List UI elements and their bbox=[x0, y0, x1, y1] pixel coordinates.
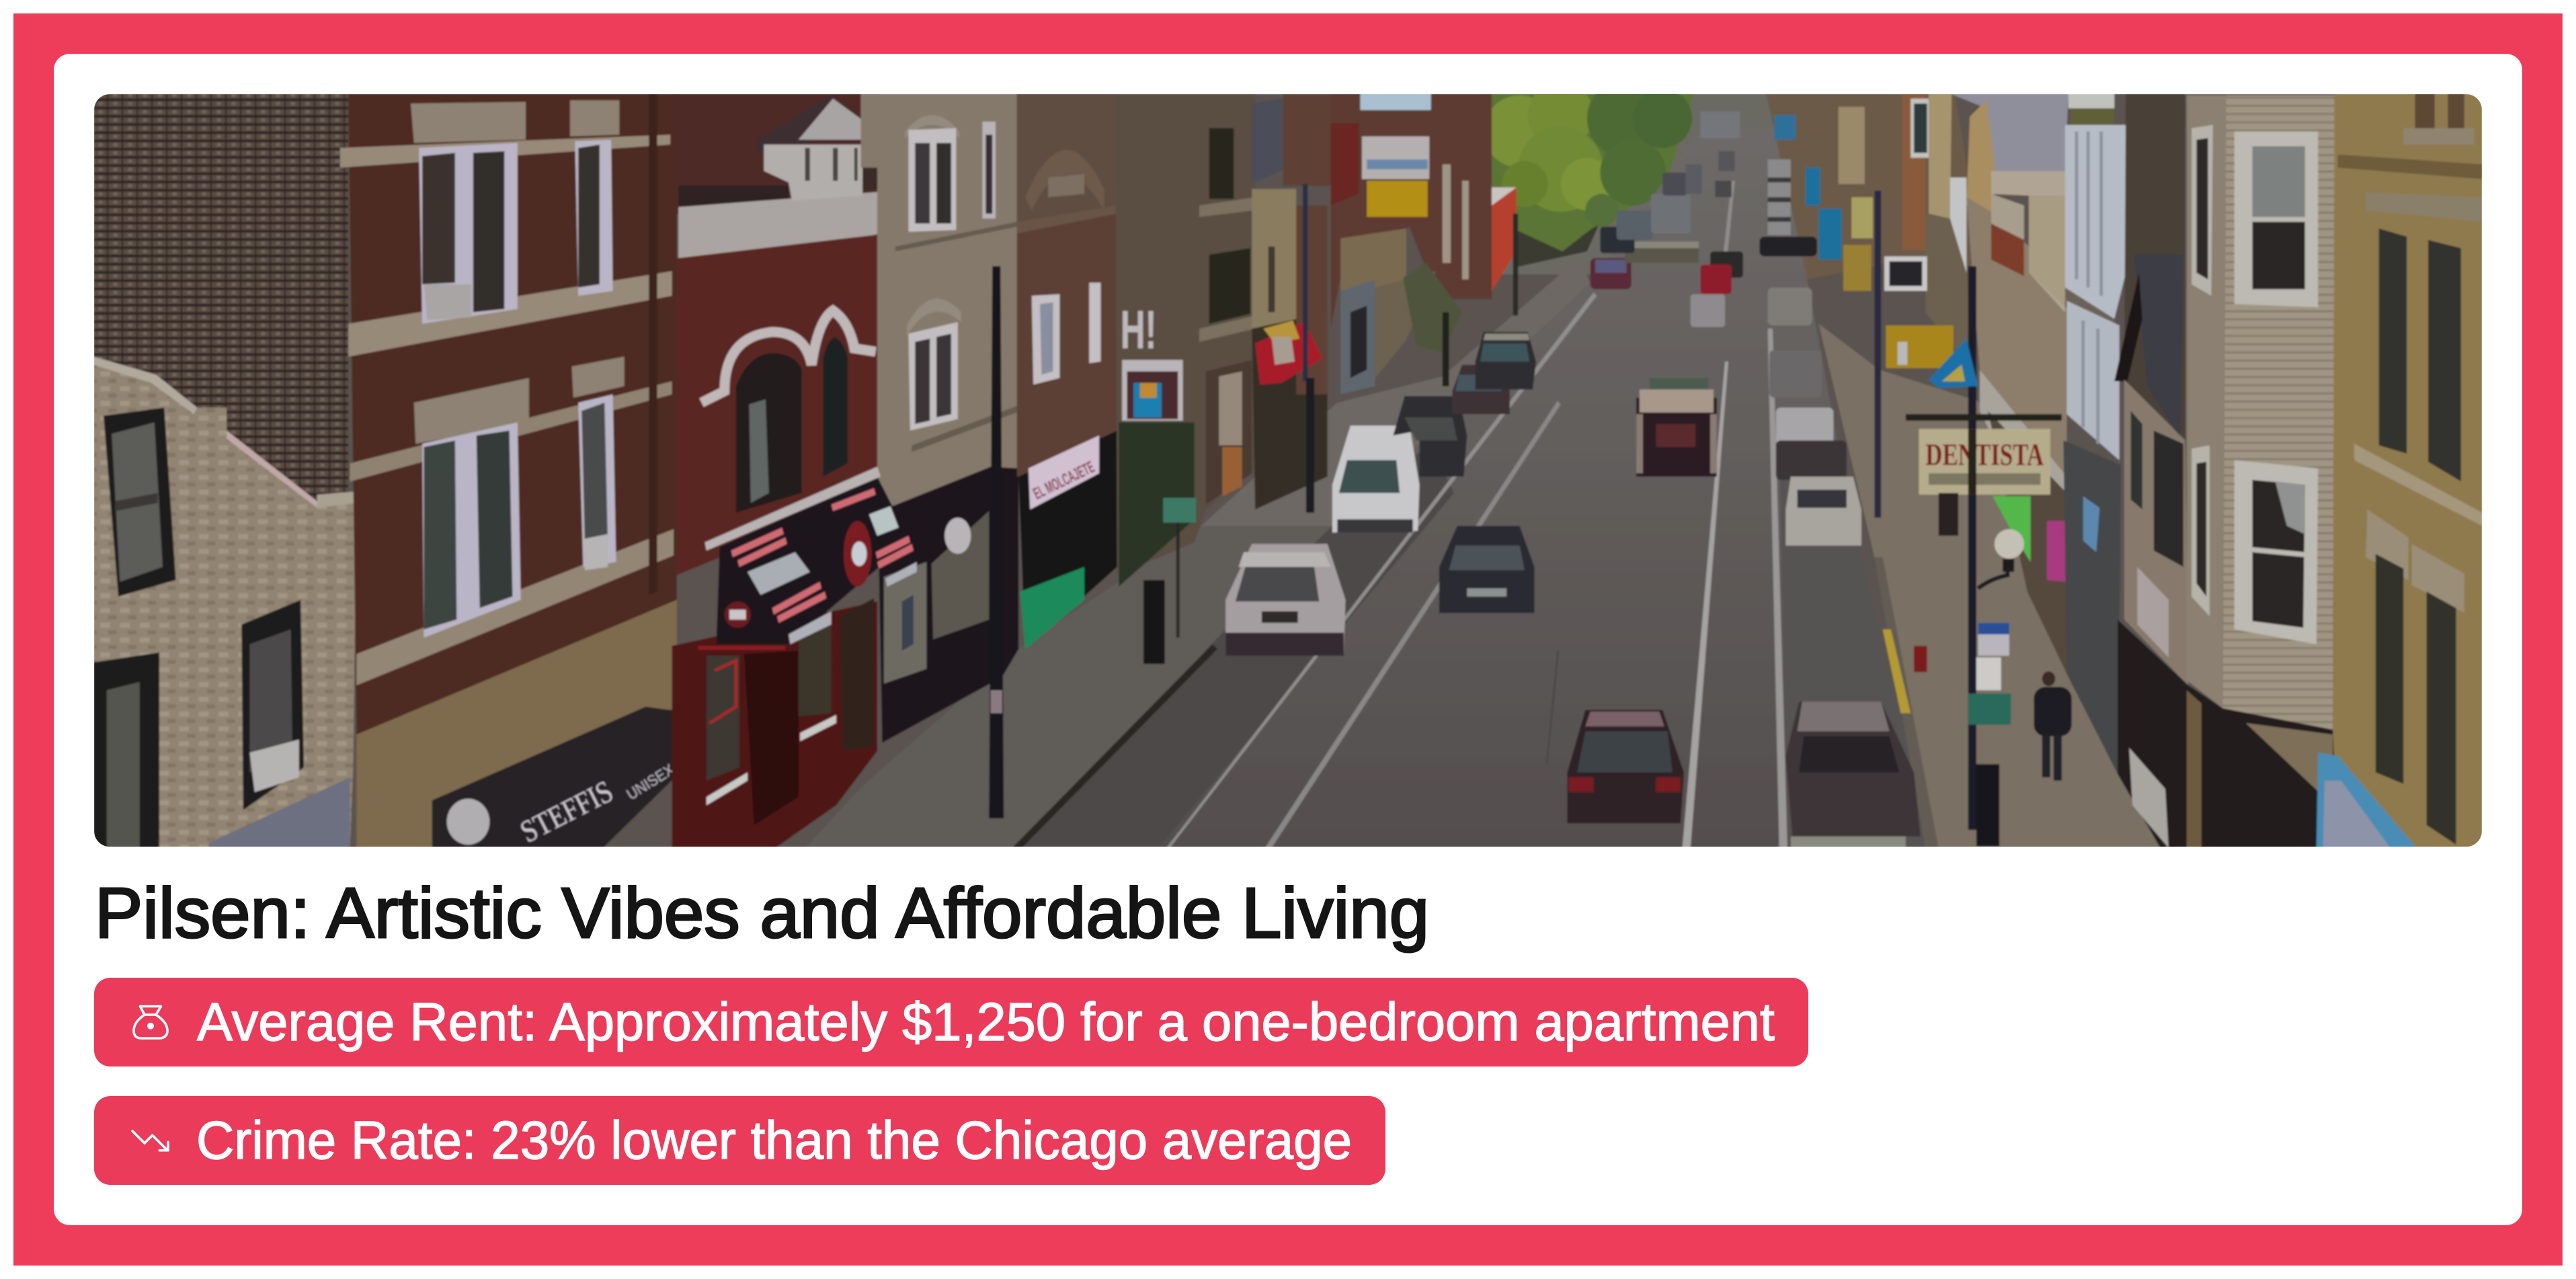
left sidewalk bbox=[805, 258, 1591, 848]
car: dark SUV bbox=[1393, 396, 1467, 477]
car: white SUV bbox=[1225, 544, 1346, 656]
cars left and center bbox=[1225, 112, 1743, 823]
road bbox=[1023, 180, 1837, 847]
storefronts under bay bbox=[2118, 619, 2338, 848]
dark storefront with lamp bbox=[879, 467, 1018, 743]
tan storefront and Steffis awning: UNISEX bbox=[623, 761, 677, 803]
pedestrian bbox=[2034, 671, 2072, 781]
car: white van bbox=[1332, 426, 1420, 533]
car: rear sedan bbox=[1567, 710, 1684, 823]
tan storefront and Steffis awning bbox=[356, 600, 685, 850]
rent pill bbox=[94, 978, 1808, 1067]
icon: money bag bbox=[134, 1006, 167, 1038]
distant traffic bbox=[1591, 112, 1743, 327]
right street furniture and signs bbox=[1774, 115, 2062, 847]
Barriola awnings bbox=[698, 467, 918, 650]
tan storefront and Steffis awning: STEFFIS bbox=[515, 775, 618, 850]
photo: Pilsen street scene bbox=[93, 79, 2483, 850]
car: dark sedan bbox=[1439, 526, 1535, 613]
cars right bbox=[1759, 159, 1921, 848]
gray stone building bbox=[861, 93, 1017, 506]
far right buildings bbox=[1766, 93, 2126, 774]
far background and trees bbox=[1491, 94, 1798, 275]
gray brick wall bbox=[93, 93, 348, 501]
icon: downward trend arrow bbox=[132, 1131, 168, 1151]
mid block buildings bbox=[1252, 93, 1517, 510]
dark brick building bbox=[1115, 93, 1255, 586]
corner building windows bbox=[93, 356, 358, 848]
dark brick building: H! bbox=[1121, 300, 1156, 360]
title: Pilsen: Artistic Vibes and Affordable Living bbox=[95, 874, 1429, 953]
tan brick corner building bbox=[93, 356, 356, 848]
arched red storefront building bbox=[672, 93, 905, 848]
lane lines bbox=[1166, 293, 1597, 848]
crime pill bbox=[94, 1096, 1385, 1185]
brown arch building bbox=[1017, 93, 1117, 649]
poles and street furniture left bbox=[989, 184, 1518, 818]
car: parked SUV bbox=[1476, 332, 1536, 389]
rent text: Average Rent: Approximately $1,250 for a one-bedroom apartment bbox=[197, 992, 1775, 1052]
right street furniture and signs: DENTISTA bbox=[1925, 438, 2044, 473]
brown arch building: EL MOLCAJETE bbox=[1031, 458, 1098, 503]
vehicle: truck bbox=[1636, 378, 1717, 477]
yellow brick building bbox=[2317, 93, 2483, 848]
siding bay building bbox=[2114, 93, 2335, 730]
right sidewalk bbox=[1818, 323, 2161, 848]
red brick building bbox=[340, 93, 677, 734]
car: parked sedan bbox=[1452, 365, 1510, 414]
crime text: Crime Rate: 23% lower than the Chicago average bbox=[196, 1110, 1352, 1170]
